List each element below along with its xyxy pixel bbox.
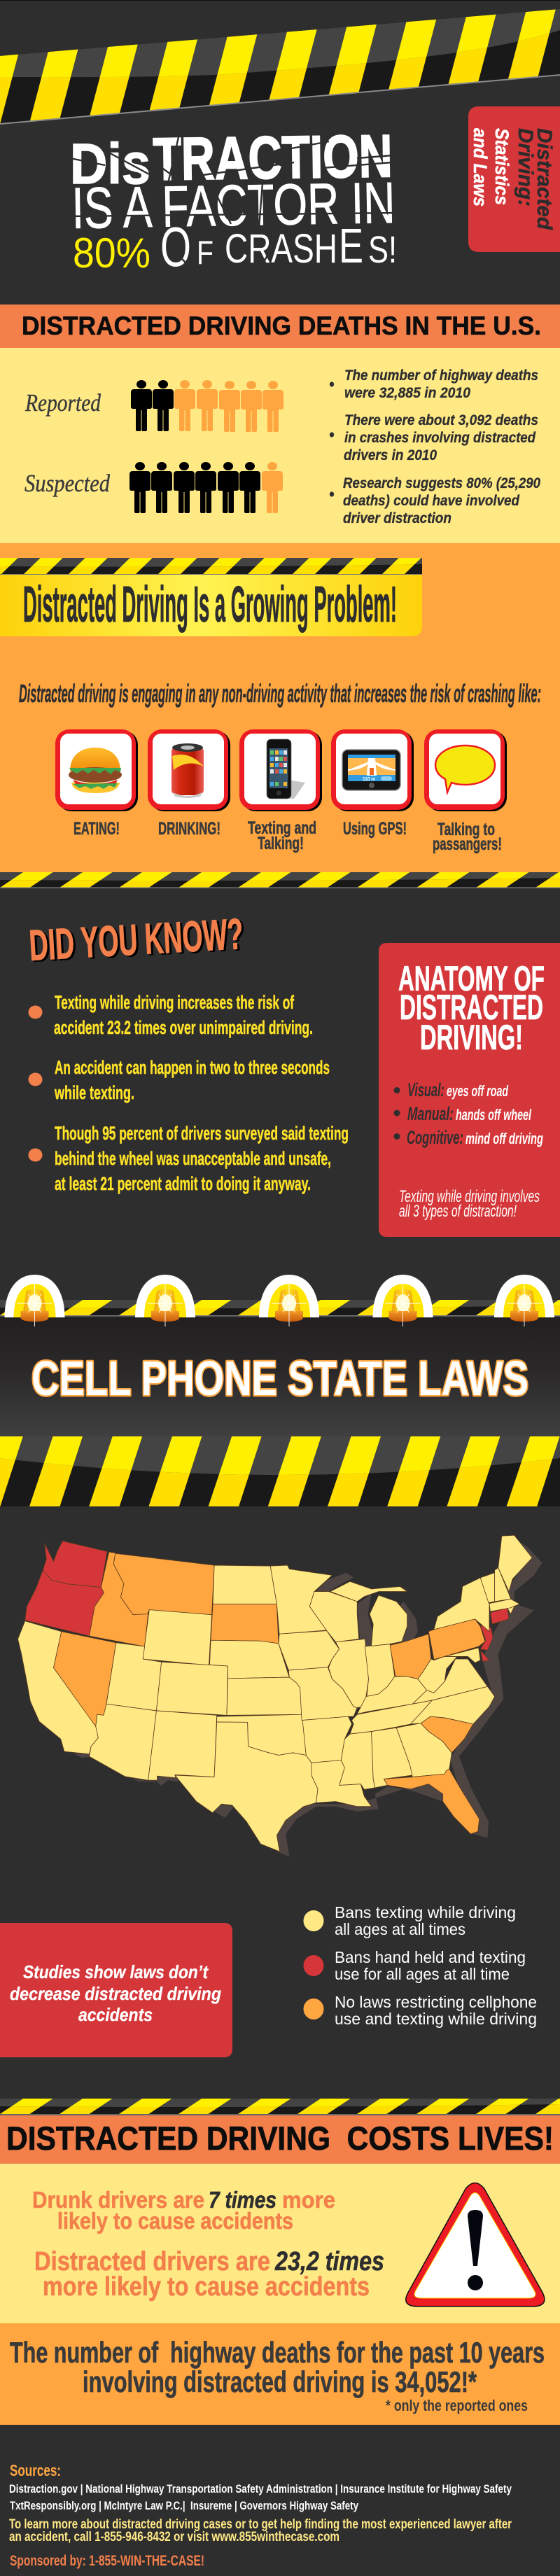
bullet list: did you know facts: accident 23.2 times over unimpaired driving. [54,1017,313,1038]
panel: total highway deaths [0,2323,560,2425]
bullet list: death facts: drivers in 2010 [344,447,437,463]
panel: cell phone state laws heading [0,1275,560,1436]
text: drunk drivers: likely to cause accidents [57,2208,293,2234]
labels: activities: EATING! [74,819,120,839]
panel: likelihood comparison [0,2164,560,2323]
legend: map key: use for all ages at all time [335,1965,510,1983]
bullet list: did you know facts: at least 21 percent admit to doing it anyway. [55,1173,311,1194]
panel: deaths in the u.s. heading band [0,304,560,348]
tile: eating [55,729,138,811]
bullet list: did you know facts: while texting. [54,1082,134,1103]
bullet list: did you know facts: behind the wheel was unacceptable and unsafe, [55,1148,331,1169]
legend: map key: No laws restricting cellphone [335,1993,537,2011]
text: distracted drivers: 23,2 times [274,2247,384,2276]
title: distraction is a factor in 80% of crashes: F [197,234,214,271]
bullet list: did you know facts: Texting while driving increases the risk of [55,992,295,1013]
text: call to action: an accident, call 1-855-946-8432 or visit www.855winthecase.com [9,2530,340,2544]
tile: drinking [148,729,230,811]
tab: distracted driving statistics and laws: and Laws [470,128,491,206]
list: types of distraction: Cognitive: [407,1127,463,1148]
list: types of distraction: Visual: [407,1079,444,1100]
icon: soda can [172,743,204,798]
labels: activities: Talking! [258,834,304,853]
icon: gps device: 110 m [363,777,375,782]
text: sponsor: Sponsored by: 1-855-WIN-THE-CASE! [10,2553,204,2569]
hazard tape: costs lives [0,2099,560,2115]
title: distraction is a factor in 80% of crashes: IS A FACTOR IN [71,170,396,241]
title: distraction is a factor in 80% of crashes: Dis [70,132,150,196]
panel: costs lives heading [0,2099,560,2164]
tile: talking to passengers [424,729,507,811]
text: source list [9,2482,512,2512]
panel: footer [0,2425,560,2576]
title: distraction is a factor in 80% of crashes: E [339,218,363,273]
icon: warning triangle [406,2183,545,2306]
tab: distracted driving statistics and laws: Driving: [514,128,537,206]
text: call to action [9,2517,512,2544]
footnote: * only the reported ones [386,2397,528,2414]
bullet list: death facts: in crashes involving distracted [344,430,536,446]
labels: activities: passangers! [433,834,502,854]
legend: map key: Bans hand held and texting [335,1948,526,1966]
pictogram: reported [131,380,284,432]
text: drunk drivers: 7 times [209,2187,276,2213]
panel: deaths in the u.s. heading band: DISTRACTED DRIVING DEATHS IN THE U.S. [22,312,541,340]
bullet list: death facts: There were about 3,092 deaths [344,412,538,428]
title: distraction is a factor in 80% of crashes: 80% [73,230,150,276]
hazard tape: tilted [0,9,560,125]
labels: activities: Texting and [248,818,316,838]
bullet list: did you know facts [28,992,349,1194]
tile: using gps [331,729,414,811]
bullet list: death facts: The number of highway deaths [344,368,538,384]
label: suspected: Suspected [24,470,110,497]
icon: smartphone [267,739,305,799]
tab: distracted driving statistics and laws: Distracted [533,128,556,230]
callout: studies show laws: Studies show laws don’t [23,1961,209,1982]
text: drunk drivers [32,2187,335,2234]
title: distraction is a factor in 80% of crashes: S! [368,229,397,271]
legend: map key: use and texting while driving [335,2010,537,2028]
text: distracted drivers: more likely to cause accidents [43,2272,370,2302]
tab: distracted driving statistics and laws: Statistics [491,128,512,205]
hazard tape: large [0,1436,560,1506]
heading: did you know [28,910,246,972]
hazard tape: with beacons [0,1300,560,1316]
note: texting involves all types [399,1187,540,1221]
panel: anatomy of distracted driving [379,943,560,1237]
icon: speech bubble [435,746,495,792]
pictogram: suspected [130,462,283,513]
text: distracted drivers [34,2247,384,2302]
title: distraction is a factor in 80% of crashes: O [160,216,191,278]
hazard tape: small [0,558,422,575]
labels: activities: Using GPS! [343,819,407,839]
hazard tape: divider [0,872,560,888]
map: united states cell phone laws [18,1535,542,1856]
panel: deaths statistics [0,348,560,543]
text: source list: TxtResponsibly.org | McIntyre Law P.C.| Insureme | Governors Highway Safety [10,2499,358,2512]
panel: did you know [0,872,560,1237]
tab: distracted driving statistics and laws [468,106,560,252]
callout: studies show laws [0,1923,232,2057]
heading: anatomy [398,959,545,1057]
legend: map key: all ages at all times [335,1920,465,1938]
legend: map key: Bans texting while driving [335,1903,516,1921]
callout: studies show laws: accidents [78,2004,153,2025]
panel: map and legend [0,1436,560,2099]
list: types of distraction: Manual: [407,1103,454,1124]
bullet list: death facts [330,368,540,526]
text: drunk drivers: Drunk drivers are [32,2187,204,2213]
list: types of distraction [393,1079,543,1148]
text: drunk drivers: more [282,2187,335,2213]
bullet list: death facts: were 32,885 in 2010 [344,385,470,401]
labels: activities [74,818,502,854]
tile: texting and talking [239,729,322,811]
panel: header [0,0,560,267]
heading: distracted driving is a growing problem [0,575,422,636]
bullet list: did you know facts: Though 95 percent of drivers surveyed said texting [55,1123,349,1144]
heading: sources: Sources: [10,2461,61,2479]
bullet list: did you know facts: An accident can happen in two to three seconds [55,1057,330,1078]
icon: warning beacons [4,1275,554,1326]
label: reported: Reported [24,389,101,416]
icon: burger [69,748,122,793]
title: distraction is a factor in 80% of crashes: CRASH [225,226,337,272]
bullet list: death facts: Research suggests 80% (25,290 [343,475,540,491]
labels: activities: Talking to [438,820,495,839]
heading: did you know: DID YOU KNOW? [30,911,246,972]
callout: studies show laws: decrease distracted driving [10,1983,221,2004]
labels: activities: DRINKING! [158,819,220,839]
title: distraction is a factor in 80% of crashes [66,122,399,278]
bullet list: death facts: driver distraction [343,510,451,526]
bullet list: death facts: deaths) could have involved [343,493,520,509]
title: distraction is a factor in 80% of crashes: TRACTION [153,122,393,193]
panel: growing problem [0,543,560,872]
list: types of distraction: eyes off road [447,1082,508,1100]
heading: did you know: DID YOU KNOW? [28,910,244,970]
legend: map key [304,1903,537,2028]
text: distracted drivers: Distracted drivers are [34,2247,270,2276]
